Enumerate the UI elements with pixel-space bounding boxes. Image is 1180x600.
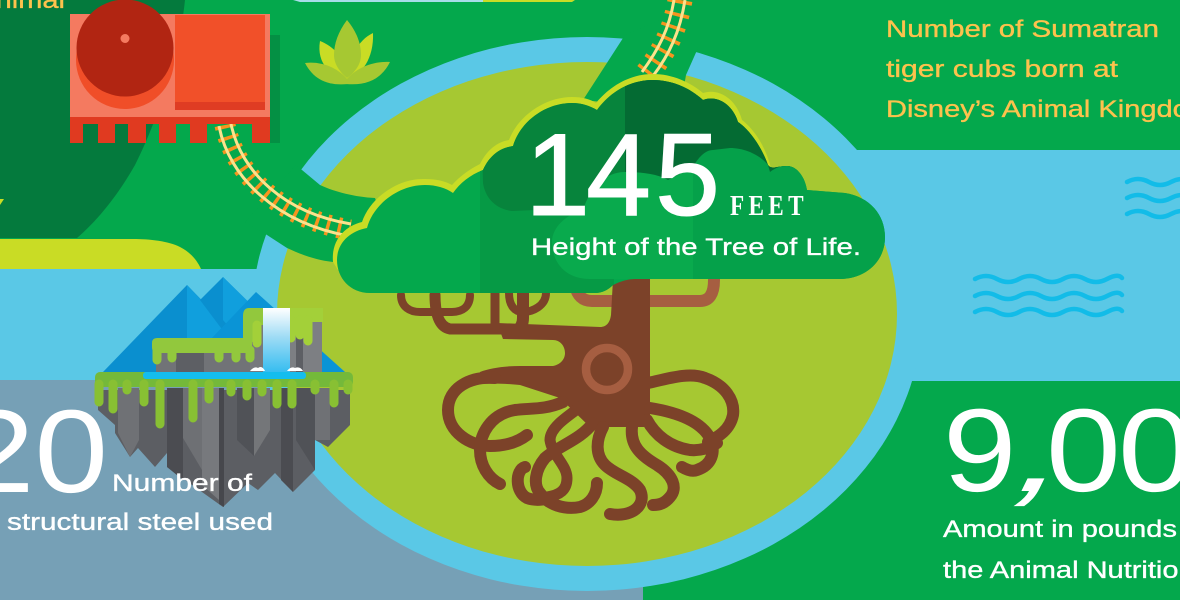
stat: 145 feet: FEET (730, 190, 804, 222)
stat: 9,000: 0 (1046, 384, 1121, 516)
stat: 145 feet (525, 109, 861, 261)
green path crossing ring: left (245, 165, 400, 265)
icon: floating island with waterfall (95, 277, 353, 507)
upper rock (156, 352, 250, 372)
left water band (0, 269, 320, 380)
mountains (103, 285, 223, 372)
roots (448, 378, 527, 446)
stat: 145 feet: Height of the Tree of Life. (531, 234, 861, 261)
tree canopy outline (333, 74, 771, 270)
pool (143, 372, 306, 379)
waterfall (263, 308, 290, 372)
text: tiger cubs (886, 16, 1180, 122)
upper slime ledge (152, 338, 252, 353)
island rock (98, 390, 350, 507)
splash (250, 367, 303, 371)
branches (435, 295, 510, 329)
tree canopy (337, 80, 885, 293)
text: tiger cubs: Number of Sumatran (886, 16, 1159, 43)
right water panel (700, 150, 1180, 381)
stat: 20: structural steel used (7, 509, 273, 536)
stat: 9,000: 9 (943, 385, 1016, 516)
stat: 9,000: , (992, 385, 1106, 517)
icon: roots and trunk of the tree (401, 279, 733, 515)
icon: train (70, 0, 280, 143)
stat: 20: Number of (112, 470, 252, 497)
light brown branch (575, 280, 714, 301)
trunk ring (586, 348, 628, 390)
stat: 20 (0, 386, 273, 536)
stat: 9,000 (943, 384, 1180, 583)
trunk body (480, 279, 650, 427)
stat: 145 feet: 145 (525, 109, 720, 240)
railway track: left (219, 124, 351, 236)
yellow-green shore (0, 239, 201, 269)
blue ring (252, 37, 922, 591)
text: tiger cubs: tiger cubs born at (886, 56, 1118, 83)
grey-blue panel (0, 380, 643, 600)
railway track: top (642, 0, 685, 76)
icon: water waves (975, 179, 1180, 315)
icon: lotus (305, 20, 390, 84)
lime circle (277, 62, 897, 566)
slime layer (95, 372, 353, 387)
bottom right green panel (643, 381, 1180, 600)
small star tip (0, 199, 4, 205)
top edge strip (293, 0, 575, 2)
green path crossing ring: top (583, 20, 698, 110)
dark green hill (0, 0, 185, 238)
